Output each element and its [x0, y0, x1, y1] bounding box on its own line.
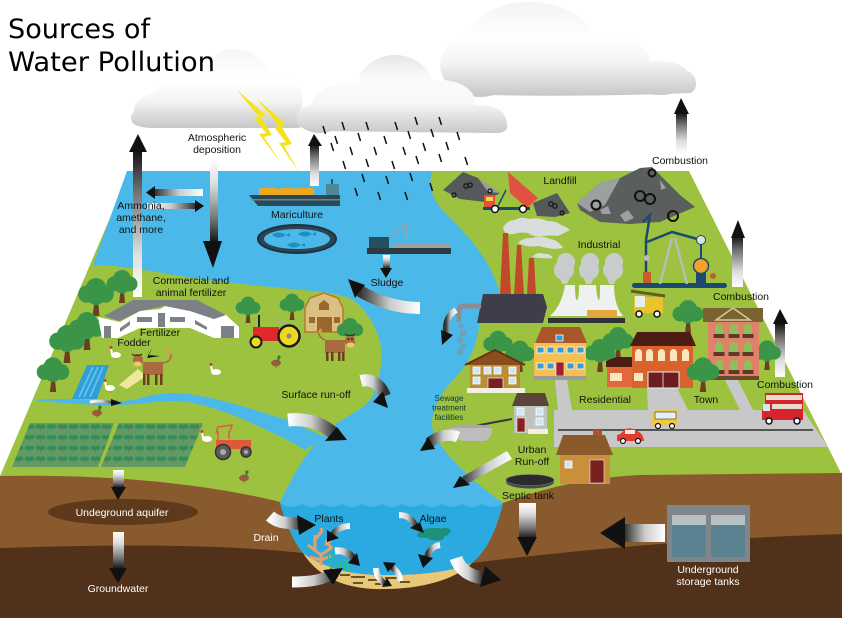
small waste pile right — [533, 193, 570, 217]
discharge pipe — [459, 306, 481, 322]
oil pump — [632, 215, 727, 288]
arrow: septic down — [517, 503, 537, 556]
title: Water Pollution — [8, 47, 215, 78]
label: groundwater: Groundwater — [88, 583, 149, 595]
label: underground storage tanks: storage tanks — [676, 576, 740, 588]
cloud: left — [131, 49, 303, 128]
arrow: surface run-off 1 — [361, 380, 388, 408]
arrow: surface run-off 2 — [288, 420, 347, 441]
label: atmospheric deposition: deposition — [193, 144, 241, 156]
label: underground storage tanks: Underground — [677, 564, 739, 576]
arrow: pond seepage — [456, 558, 501, 587]
plants: seagrass — [328, 552, 348, 572]
label: urban run-off: Run-off — [515, 456, 549, 468]
industrial — [456, 215, 727, 356]
label: algae: Algae — [420, 513, 447, 525]
cow right — [318, 328, 355, 361]
label: combustion right: Combustion — [757, 379, 813, 391]
algae — [417, 528, 451, 540]
icon: dredging platform — [367, 224, 451, 254]
sediment dashes — [340, 575, 410, 584]
water: river, bay and pond — [33, 171, 503, 575]
plants: coral — [308, 528, 331, 565]
label: sewage treatment: treatment — [432, 404, 467, 412]
gray house — [512, 393, 549, 434]
arrow: sediment cycle up — [383, 562, 400, 581]
discharge drips — [456, 323, 466, 356]
label: mariculture: Mariculture — [271, 209, 323, 221]
arrow: sludge down — [380, 255, 392, 278]
road network — [554, 380, 828, 447]
double decker bus — [762, 393, 803, 424]
label: urban run-off: Urban — [518, 444, 546, 456]
underground: soil layers — [0, 473, 842, 618]
sewage basin — [450, 419, 512, 441]
arrow: algae out — [418, 545, 440, 568]
label: industrial: Industrial — [578, 239, 620, 251]
label: sewage treatment: facilities — [435, 413, 463, 422]
label: fertilizer: Commercial and — [153, 275, 229, 287]
tree front of hall — [687, 357, 719, 392]
fertilizer pointer — [147, 347, 160, 358]
land: green plateau — [0, 171, 842, 520]
arrow: to aquifer — [111, 470, 126, 500]
pond: deep water — [280, 503, 503, 575]
brick apartment — [703, 308, 763, 380]
town — [450, 300, 803, 488]
farm building — [98, 300, 239, 338]
underground storage tanks — [667, 505, 750, 562]
barn — [305, 293, 343, 332]
cow left — [132, 349, 172, 385]
trees left — [37, 270, 304, 392]
label: sludge: Sludge — [371, 277, 404, 289]
arrow: deposition down — [203, 159, 222, 268]
cloud: right top — [421, 2, 696, 97]
red tractor — [250, 315, 300, 348]
town hall — [606, 332, 696, 388]
arrow: drain — [270, 515, 316, 535]
orange tractor — [216, 425, 251, 460]
icon: rain — [323, 117, 468, 200]
arrow: algae in — [399, 515, 424, 533]
arrow: sewage — [420, 435, 458, 451]
aquifer ellipse — [48, 499, 198, 525]
label: ammonia: Ammonia, — [117, 200, 165, 212]
label: residential: Residential — [579, 394, 631, 406]
arrow: plants out — [335, 551, 360, 566]
label: sewage treatment: Sewage — [435, 394, 464, 403]
arrow: sediment cycle down — [376, 568, 392, 587]
title — [8, 14, 215, 78]
label: aquifer: Undeground aquifer — [76, 507, 169, 519]
bus — [652, 410, 677, 428]
brown house — [556, 430, 613, 484]
label: atmospheric deposition: Atmospheric — [188, 132, 246, 144]
smoke plumes — [503, 218, 570, 258]
label: ammonia: and more — [119, 224, 163, 236]
icon: fish farm — [258, 225, 336, 253]
birds — [92, 346, 281, 483]
label: fertilizer: animal fertilizer — [156, 287, 227, 299]
car — [617, 428, 644, 444]
landfill — [443, 167, 695, 224]
factory chimneys — [500, 233, 536, 295]
label: town: Town — [694, 394, 718, 406]
arrow: combustion middle — [731, 220, 745, 287]
label: drain: Drain — [253, 532, 279, 544]
cloud: centre rain cloud — [297, 55, 507, 133]
label: fertilizer small: Fertilizer — [140, 327, 181, 339]
fodder trough — [119, 369, 146, 389]
arrow: ammonia right — [147, 200, 204, 212]
label: fodder: Fodder — [117, 337, 151, 349]
tower base — [548, 318, 625, 323]
crane truck — [631, 291, 665, 317]
label: ammonia: amethane, — [116, 212, 166, 224]
arrow: lower sediment — [292, 568, 343, 585]
arrow: plants in — [327, 526, 350, 542]
train — [587, 310, 617, 317]
crop fields — [12, 423, 203, 467]
label: septic tank: Septic tank — [502, 490, 555, 502]
arrow: sludge curved — [348, 279, 420, 308]
label: combustion middle: Combustion — [713, 291, 769, 303]
big waste pile — [577, 167, 695, 224]
arrow: big vertical up arrow — [129, 134, 147, 297]
arrow: stream — [90, 399, 122, 406]
irrigation pool — [72, 365, 109, 399]
arrow: pipe discharge — [441, 310, 456, 345]
arrow: urban run-off — [453, 451, 512, 488]
tan house — [465, 350, 525, 393]
icon: cargo ship — [249, 179, 340, 206]
trees behind houses — [483, 300, 781, 372]
arrow: from storage tanks — [600, 517, 665, 549]
label: combustion top: Combustion — [652, 155, 708, 167]
arrow: combustion right — [773, 309, 788, 377]
farm group — [12, 270, 363, 483]
pond: sediment crescent — [303, 553, 472, 589]
label: surface run-off: Surface run-off — [281, 389, 351, 401]
septic tank lid — [506, 474, 554, 488]
arrow: ammonia left — [146, 186, 203, 199]
icon: lightning bolts — [237, 90, 299, 172]
cooling towers — [550, 285, 623, 316]
arrow: combustion top — [674, 98, 689, 153]
small waste pile left — [443, 172, 500, 202]
title: Sources of — [8, 14, 151, 45]
label: landfill: Landfill — [543, 175, 577, 187]
factory shed — [477, 294, 547, 323]
tree behind cow — [337, 318, 363, 346]
yellow house — [534, 327, 587, 380]
cooling tower steam — [554, 253, 623, 284]
dump truck — [483, 172, 538, 212]
label: plants: Plants — [314, 513, 344, 525]
arrow: evaporation up — [308, 134, 322, 186]
arrow: to groundwater — [109, 532, 127, 583]
